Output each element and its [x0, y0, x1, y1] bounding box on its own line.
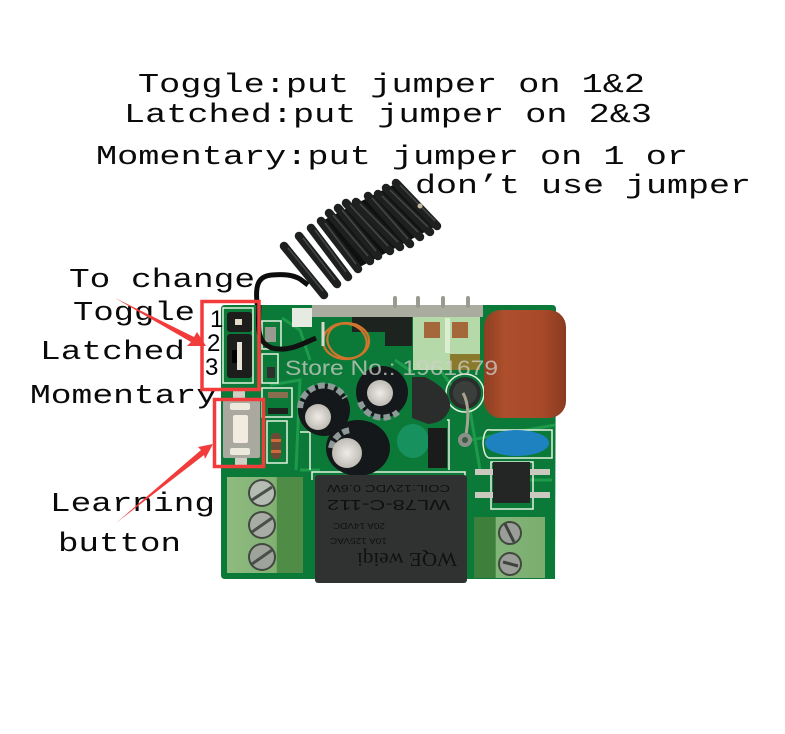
- learning push button: [223, 391, 260, 466]
- pin number 2: 2: [207, 330, 220, 357]
- relay: [315, 475, 467, 583]
- electrolytic capacitor front: [326, 420, 390, 476]
- white component: [292, 308, 312, 327]
- silver strip module: [312, 305, 483, 317]
- relay brand label: WQE weiqi: [357, 548, 457, 570]
- label: button: button: [58, 530, 181, 560]
- text: latched instruction: Latched:put jumper on 2&3: [124, 101, 652, 131]
- relay rating label: 20A 14VDC: [333, 521, 385, 530]
- highlight box: jumper: [202, 302, 259, 390]
- electrolytic capacitor left: [298, 384, 350, 436]
- electrolytic capacitor middle: [356, 366, 408, 418]
- watermark: store number: Store No.: 1961679: [285, 357, 498, 380]
- heading: jumper instructions: [96, 71, 751, 202]
- highlight box: button: [214, 400, 264, 466]
- relay coil label: COIL:12VDC 0.6W: [326, 482, 450, 493]
- label: learning: Learning: [50, 490, 215, 520]
- jumper header: [227, 312, 252, 378]
- antenna coil: [257, 183, 437, 310]
- label: momentary: Momentary: [30, 382, 217, 412]
- circuit board: [221, 298, 566, 583]
- label: latched: Latched: [40, 338, 185, 368]
- black transistor: [412, 377, 450, 424]
- relay rating label two: 10A 125VAC: [330, 536, 387, 545]
- pin number 1: 1: [210, 306, 223, 333]
- blue ceramic capacitor: [485, 430, 549, 456]
- copper coil: [322, 318, 372, 364]
- pin numbers: [205, 306, 223, 381]
- pcb traces: [270, 318, 555, 480]
- small diode: [271, 433, 281, 459]
- labels: left side: [30, 266, 255, 560]
- black smd chip: [352, 317, 412, 346]
- antenna wire on board: [258, 305, 316, 349]
- small smd parts: [265, 327, 288, 414]
- transformer: [413, 317, 480, 370]
- label: to change: To change: [69, 266, 255, 296]
- arrow: to jumper: [115, 298, 206, 346]
- pcb base: [221, 305, 556, 579]
- text: momentary instruction: Momentary:put jumper on 1 or: [96, 143, 688, 173]
- relay model label: WL78-C-112: [327, 496, 450, 513]
- silkscreen outlines: [223, 308, 552, 509]
- red film capacitor: [484, 310, 566, 418]
- smd part: [428, 428, 447, 468]
- arrow: to button: [116, 444, 213, 523]
- left screw terminal: [227, 477, 303, 573]
- bridge rectifier: [475, 462, 550, 503]
- right screw terminal: [474, 517, 545, 578]
- green inductor: [397, 424, 429, 458]
- header pins: [395, 298, 468, 306]
- pin number 3: 3: [205, 354, 218, 381]
- text: momentary instruction continued: don’t use jumper: [415, 172, 751, 202]
- text: toggle instruction: Toggle:put jumper on 1&2: [138, 71, 645, 101]
- diode lead: [449, 377, 481, 447]
- label: toggle: Toggle: [73, 299, 195, 329]
